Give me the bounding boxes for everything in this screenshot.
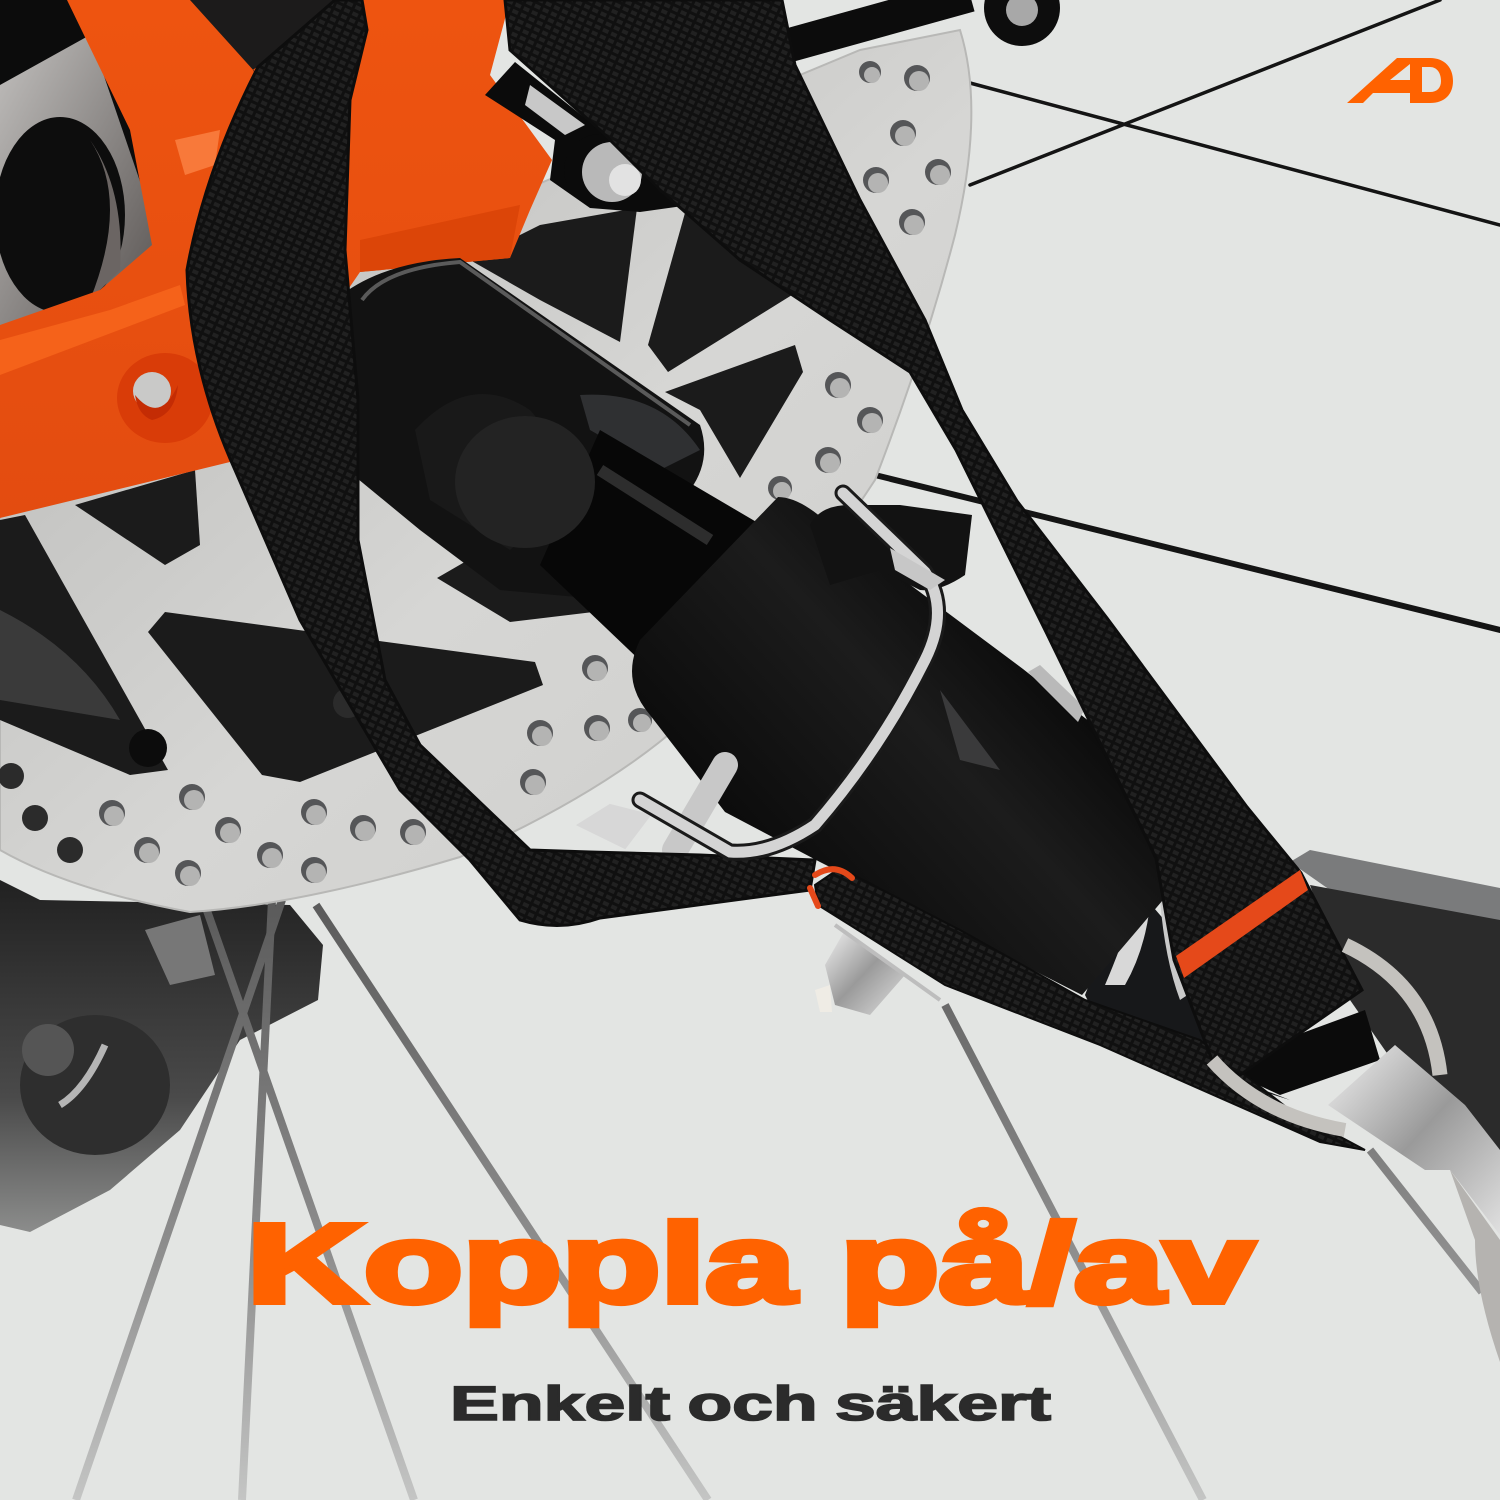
derailleur at lower left [0,880,323,1232]
dark rotor holes [0,688,363,863]
black sleeve tube [632,497,1180,995]
black hitch bracket and shaft [335,258,770,670]
orange stitching on strap [1176,870,1308,978]
brand logo [1347,58,1453,103]
rotor hole highlights [104,67,950,886]
bolts at top [485,0,1060,212]
left webbing strap [187,0,815,926]
subtitle: Enkelt och säkert [450,1378,1051,1431]
upper right webbing strap [505,0,1362,1075]
orange bicycle frame [0,0,552,518]
upper and right spokes [875,0,1500,630]
locking pin [578,765,725,850]
lower webbing strap [815,868,1365,1150]
bolt nut below sleeve [815,925,940,1015]
rotor holes [99,61,951,886]
steel clip ring [640,493,945,852]
lower fading spokes [76,900,1482,1500]
brake rotor [0,30,971,912]
end cap [455,416,595,548]
shiny weld [1085,880,1380,1100]
title: Koppla på/av [247,1201,1254,1326]
silver D-ring and snap hook [1212,945,1500,1362]
grey dog leash plate [1290,850,1500,1180]
rotor cutouts [0,195,803,782]
orange stitching at knot [810,869,852,906]
fabric tail knot [810,505,972,590]
frame window behind struts [0,0,170,330]
